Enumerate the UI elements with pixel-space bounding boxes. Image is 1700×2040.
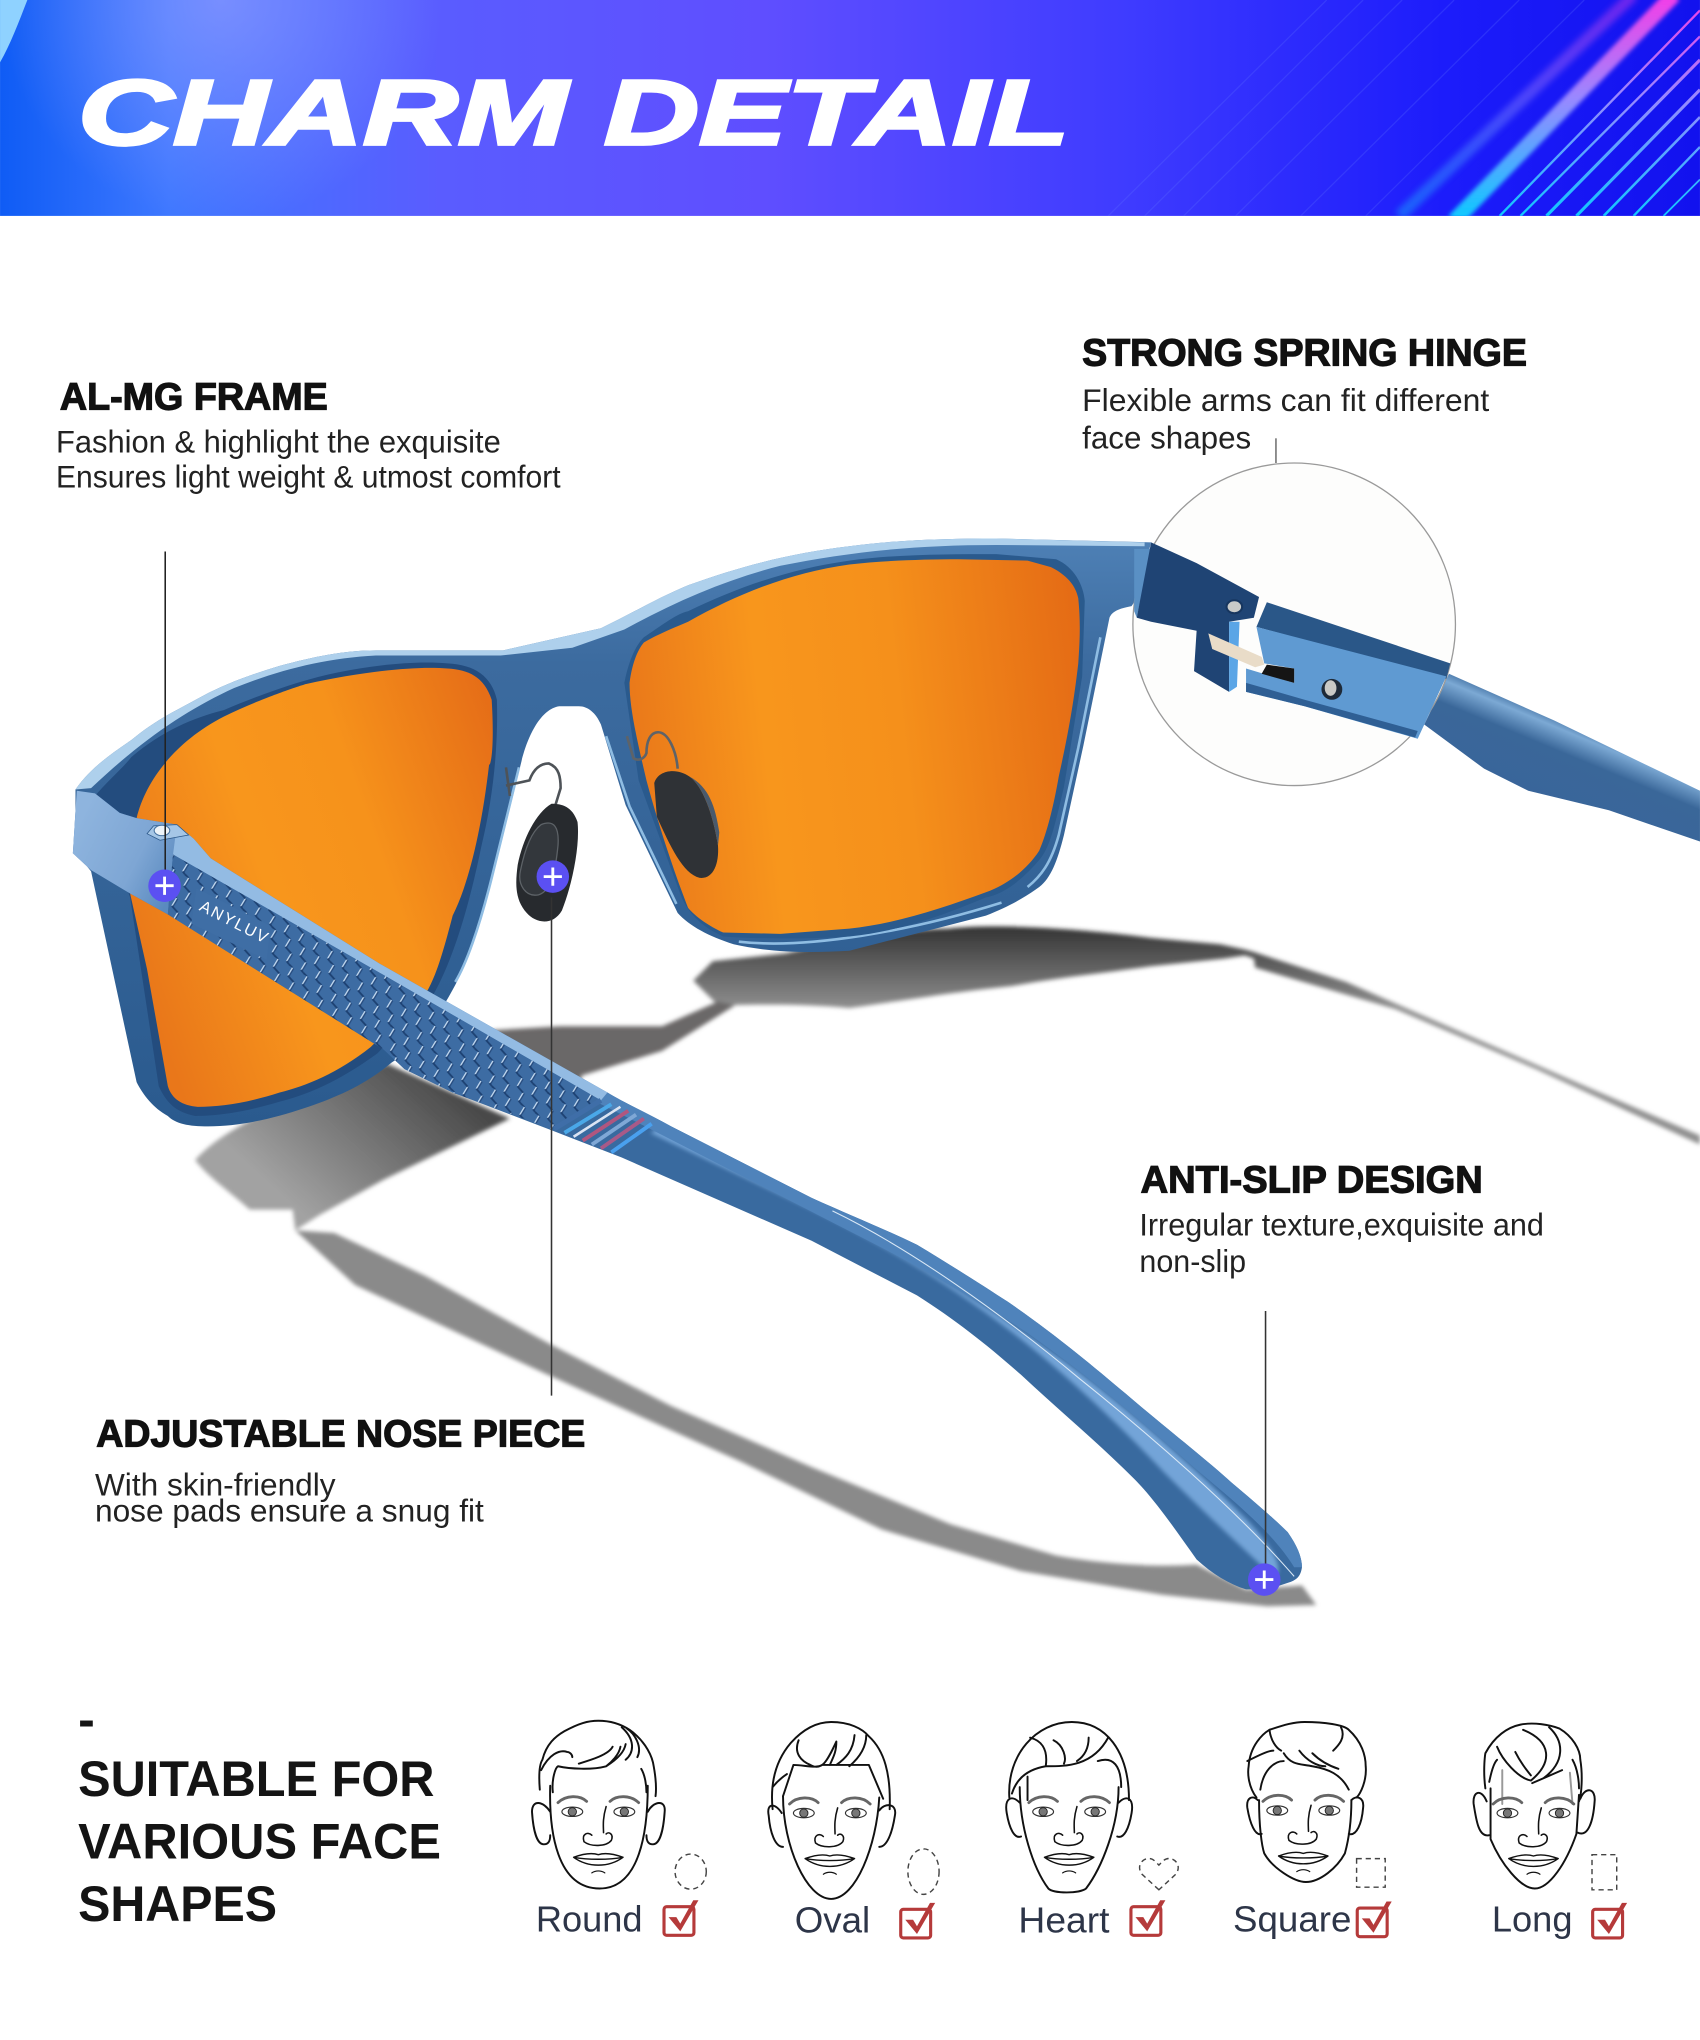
shadow: near arm [295, 1230, 1316, 1606]
temple textured band [168, 855, 601, 1129]
marker: anti-slip [1248, 1563, 1281, 1596]
pad [516, 804, 578, 921]
checkbox [901, 1903, 935, 1938]
hinge screw [154, 825, 170, 836]
label: Long [1492, 1898, 1573, 1939]
section heading: suitable for various face shapes: SHAPES [78, 1876, 277, 1932]
face shape: square [1233, 1722, 1392, 1939]
wire [627, 732, 678, 769]
square outline hint [1357, 1859, 1385, 1887]
banner streaks [1108, 0, 1700, 221]
inner dark rim, right lens [624, 554, 1085, 938]
brand plate [191, 888, 271, 960]
nose pad: left [506, 763, 578, 921]
temple light band [650, 1129, 1278, 1578]
brand name: ANYLUV [197, 897, 271, 947]
leader line: hinge [1275, 438, 1277, 463]
far temple arm [1424, 674, 1700, 842]
callout: strong spring hinge [1082, 331, 1527, 456]
section heading: suitable for various face shapes: SUITABLE FOR [78, 1751, 434, 1807]
description line 2: Ensures light weight & utmost comfort [56, 460, 561, 495]
banner background [0, 0, 1700, 216]
temple end piece [73, 791, 182, 914]
heading: ANTI-SLIP DESIGN [1141, 1159, 1483, 1201]
description line 2: nose pads ensure a snug fit [95, 1494, 484, 1529]
callout: adjustable nose piece [95, 1412, 585, 1529]
round outline hint [675, 1854, 706, 1889]
leader line: anti-slip [1265, 1311, 1267, 1579]
heading: STRONG SPRING HINGE [1082, 331, 1527, 373]
oval outline hint [908, 1849, 939, 1894]
right lens [630, 559, 1080, 934]
pad side [689, 776, 719, 845]
title: CHARM DETAIL [78, 60, 1069, 164]
section heading: suitable for various face shapes: VARIOUS FACE [78, 1814, 441, 1870]
description line 2: face shapes [1082, 421, 1251, 456]
label: Round [536, 1898, 643, 1939]
banner highlight [0, 0, 520, 216]
banner corner accent [0, 0, 27, 62]
plate [191, 888, 271, 960]
temple weave pattern [168, 855, 601, 1129]
leader line: frame [164, 551, 166, 884]
description: Fashion & highlight the exquisite [56, 425, 501, 460]
bright strip [1229, 622, 1240, 692]
checkbox [1131, 1900, 1165, 1935]
face shape: heart [1006, 1722, 1178, 1941]
frame top highlight [75, 538, 1145, 789]
checkbox [664, 1900, 698, 1935]
temple lower edge [1246, 683, 1418, 737]
face drawing [1247, 1722, 1366, 1882]
pad inner [520, 823, 558, 895]
description: Flexible arms can fit different [1082, 383, 1490, 418]
label: Heart [1018, 1900, 1109, 1941]
callout: anti-slip design [1139, 1159, 1544, 1279]
hinge screw plate [147, 825, 189, 840]
description: With skin-friendly [95, 1468, 336, 1503]
temple upper band [173, 825, 607, 1100]
near temple arm [73, 791, 1302, 1589]
glasses [73, 538, 1700, 1589]
leader line: nose piece [551, 897, 553, 1396]
face drawing [768, 1722, 895, 1899]
spring [1208, 633, 1264, 667]
inner dark rim, left lens [95, 663, 497, 1116]
wire [506, 763, 561, 805]
face drawing [1474, 1724, 1595, 1889]
checkbox [1593, 1903, 1627, 1938]
frame gap highlights [455, 637, 1100, 982]
shadows of the glasses [195, 926, 1700, 1606]
nose pad: right [627, 732, 719, 878]
hinge magnifier [1133, 463, 1455, 786]
front frame [75, 538, 1151, 1126]
marker: nose piece [537, 860, 569, 893]
temple stripes [554, 1100, 652, 1152]
pad [654, 771, 718, 878]
section heading: suitable for various face shapes [78, 1691, 441, 1932]
temple light section [1246, 627, 1446, 739]
heading: ADJUSTABLE NOSE PIECE [96, 1412, 585, 1454]
shadow: lower blob [195, 1064, 510, 1230]
shadow: upper blob and far arm [693, 926, 1700, 1145]
face shape: oval [768, 1722, 939, 1941]
shadow: middle blob [436, 1001, 735, 1134]
face shape: round [532, 1721, 706, 1939]
description: Irregular texture,exquisite and [1139, 1208, 1544, 1243]
header banner [0, 0, 1700, 221]
label: Square [1233, 1898, 1351, 1939]
callout: al-mg frame [56, 376, 561, 495]
heading: AL-MG FRAME [60, 376, 328, 418]
magnifier circle [1133, 463, 1455, 786]
section heading: suitable for various face shapes: - [78, 1691, 95, 1747]
face shape: long [1474, 1724, 1627, 1939]
arm screw [1321, 679, 1342, 700]
heart outline hint [1140, 1858, 1178, 1890]
marker: frame [148, 869, 181, 902]
checkbox [1357, 1902, 1392, 1937]
left lens [130, 668, 493, 1107]
top screw [1227, 600, 1242, 613]
description line 2: non-slip [1139, 1244, 1246, 1279]
temple dark band [1256, 602, 1450, 679]
hinge dark block [1137, 542, 1259, 692]
face drawing [532, 1721, 665, 1889]
temple upper strip [598, 1093, 1302, 1567]
arm screw head [1325, 680, 1336, 696]
face drawing [1006, 1722, 1132, 1892]
temple hairline [832, 1211, 1294, 1576]
slot [1262, 665, 1294, 683]
long outline hint [1592, 1855, 1617, 1890]
frame end piece edge [1134, 549, 1151, 618]
label: Oval [795, 1900, 870, 1941]
